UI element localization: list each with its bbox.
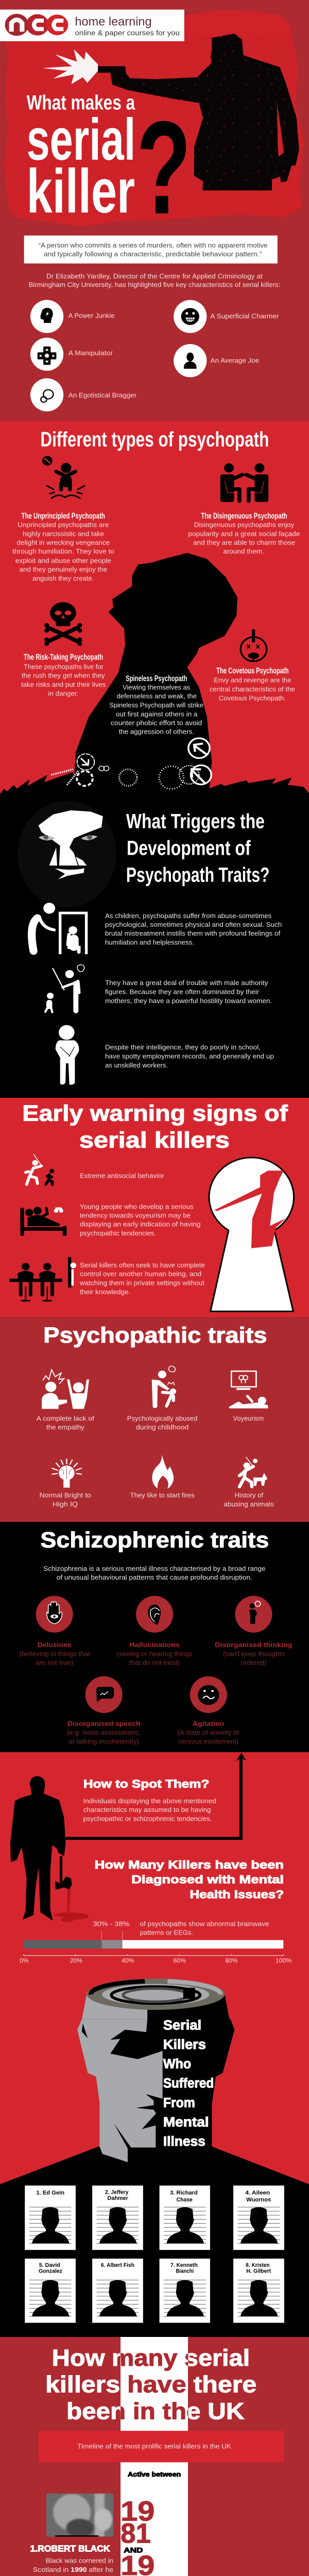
card: Ed Gein: 1. Ed Gein [36, 2190, 64, 2196]
trait: lack of empathy [37, 1370, 94, 1431]
sign: watching in private: control over another human being, and [80, 1270, 201, 1278]
heading [126, 809, 265, 859]
card: Kenneth Bianchi [160, 2259, 210, 2323]
heading: been in the UK [66, 2398, 244, 2425]
trait: lack of empathy: the empathy [46, 1423, 84, 1431]
attribution text: Dr Elizabeth Yardley, Director of the Centre for Applied Criminology at [46, 273, 263, 280]
chart: brainwave bar: of psychopaths show abnormal brainwave [140, 1920, 269, 1927]
characteristic: egotistical bragger [30, 378, 137, 412]
arrow [64, 1753, 246, 1838]
entry: Robert Black: Scotland in 1990 after he [33, 2566, 113, 2573]
card: David Gonzalez [25, 2259, 76, 2323]
trait: agitation [190, 1676, 227, 1727]
illustration: head silhouette [73, 553, 237, 796]
trait: disorganised thinking: Disorganised thinking [215, 1641, 292, 1649]
heading: Psychopathic traits [43, 1323, 267, 1348]
icon: dagger through face [241, 630, 267, 662]
trait: starts fires [130, 1454, 195, 1499]
trait: voyeurism [229, 1371, 268, 1422]
heading: Development of [127, 836, 251, 859]
text: how to spot them: How to Spot Them? [83, 1777, 209, 1790]
panel: hero [0, 0, 309, 421]
trait: psychologically abused: during childhood [136, 1423, 188, 1431]
text: authority [105, 979, 272, 1005]
characteristic: egotistical bragger: An Egotistical Bragger [68, 392, 137, 399]
card: David Gonzalez: 5. David [39, 2262, 60, 2268]
sign: watching in private: Serial killers often seek to have complete [80, 1261, 205, 1269]
sign: antisocial behaviour: Extreme antisocial behavior [80, 1172, 164, 1179]
intro text [43, 1565, 265, 1581]
entry: Robert Black: 1.ROBERT BLACK [30, 2544, 110, 2553]
text: authority: figures. Because they are often dominated by their [105, 988, 260, 995]
card: Aileen Wuornos [233, 2185, 284, 2250]
trait: disorganised thinking: ordered) [241, 1659, 266, 1666]
trait: abusing animals: History of [234, 1492, 263, 1499]
heading: serial killers who suffered: Mental [163, 2114, 209, 2129]
card: unprincipled psychopath: through humiliation. They love to [12, 548, 114, 555]
panel: schizophrenic traits [0, 1522, 309, 1752]
trait: high IQ: Normal Bright to [40, 1492, 91, 1499]
card: David Gonzalez: Gonzalez [39, 2268, 62, 2274]
trait: delusions: Delusions [38, 1641, 72, 1649]
chart: brainwave bar: 40% [122, 1957, 134, 1964]
icon: adult and child in doorway [32, 903, 87, 954]
card: spineless psychopath: out first against others in a [116, 710, 198, 718]
photo: Robert Black [46, 2494, 113, 2537]
quote box [24, 235, 278, 263]
heading: Schizophrenic traits [40, 1528, 269, 1552]
card: Richard Chase [160, 2185, 210, 2250]
text: agitation description [177, 1729, 239, 1745]
card: disingenuous psychopath: popularity and a great social façade [188, 530, 300, 537]
heading: Early warning signs of [22, 1100, 288, 1126]
card: disingenuous psychopath: and they are able to charm those [193, 539, 295, 546]
attribution text [28, 273, 281, 289]
card: Richard Chase: Chase [176, 2197, 193, 2203]
trait: hallucinations: Hallucinations [129, 1641, 180, 1649]
chart: brainwave bar [20, 1920, 291, 1964]
heading: serial killers who suffered: Serial [163, 2018, 201, 2032]
card: Albert Fish: 6. Albert Fish [101, 2262, 134, 2268]
text: how to spot them: Individuals displaying the above mentioned [83, 1797, 216, 1805]
trait: delusions: are not true) [36, 1659, 73, 1666]
trait: voyeurism: Voyeurism [233, 1415, 264, 1422]
title question mark: ? [136, 94, 191, 242]
trait: disorganised thinking: (can't keep thoughts [223, 1650, 285, 1657]
card: Jeffery Dahmer: Dahmer [108, 2195, 128, 2201]
characteristic: power junkie: A Power Junkie [68, 312, 115, 319]
title [27, 91, 135, 226]
sign: watching in private: their knowledge. [80, 1289, 130, 1296]
card: disingenuous psychopath: around them. [224, 548, 264, 555]
card: unprincipled psychopath [12, 512, 114, 582]
illustration: grass and scattered symbols [0, 738, 309, 796]
text: abuse: psychological, sometimes physical and often sexual. Such [105, 921, 282, 928]
trait: agitation: Agitation [193, 1720, 224, 1727]
card: risk-taking psychopath: These psychopaths live for [24, 663, 104, 670]
chart: brainwave bar: 30% - 38% [93, 1920, 129, 1927]
illustration: labyrinth head top [82, 1978, 230, 2020]
card: Kenneth Bianchi: 7. Kenneth [170, 2262, 198, 2268]
characteristic: superficial charmer [174, 300, 279, 333]
heading: How Many Killers have been [95, 1858, 284, 1871]
heading: killers have there [45, 2371, 256, 2398]
heading: What Triggers the [126, 809, 265, 833]
icon: standing figure [56, 1025, 79, 1084]
illustration: keyhole with knife [209, 1158, 294, 1311]
title: killer [27, 156, 135, 226]
heading: serial killers who suffered: Suffered [163, 2076, 214, 2091]
sign: voyeurism: displaying an early indication of having [80, 1221, 201, 1228]
characteristic: manipulator [30, 337, 113, 371]
label: active between: Active between [128, 2470, 181, 2478]
card: spineless psychopath: Viewing themselves as [123, 684, 190, 691]
characteristic: manipulator: A Manipulator [68, 349, 113, 357]
card: unprincipled psychopath: Unprincipled psychopaths are [18, 521, 109, 529]
years: 1981 and 1986: 81 [121, 2518, 151, 2549]
card: Aileen Wuornos: 4. Aileen [245, 2190, 270, 2196]
text: school [105, 1044, 274, 1069]
trait: delusions: (believing in things that [19, 1650, 90, 1657]
heading: serial killers who suffered [163, 2018, 214, 2149]
card: spineless psychopath: Spineless Psychopath will strike [109, 701, 203, 709]
characteristic: average joe [174, 344, 259, 377]
illustration: split-face head and shoulders [0, 2019, 309, 2337]
sign: voyeurism [20, 1203, 201, 1237]
text: agitation description: (A state of anxiety or [177, 1729, 239, 1736]
panel: psychopath types [0, 421, 309, 796]
trait: disorganised speech [67, 1676, 140, 1727]
years: 1981 and 1986 [121, 2496, 154, 2576]
years: 1981 and 1986: 19 [121, 2496, 154, 2527]
heading: serial killers [79, 1127, 230, 1153]
card: Richard Chase: 3. Richard [170, 2190, 198, 2196]
trait: disorganised speech: Disorganised speech [67, 1720, 140, 1727]
card: Kristen H. Gilbert: H. Gilbert [246, 2268, 271, 2274]
years: 1981 and 1986: AND [124, 2547, 143, 2554]
entry: Robert Black: Black was cornered in [46, 2557, 113, 2565]
heading [45, 2345, 256, 2425]
text: how to spot them: characteristics may assumed to be having [83, 1806, 211, 1814]
heading [22, 1100, 288, 1153]
card: unprincipled psychopath: delight in wrecking vengeance [17, 539, 110, 546]
illustration: gunman silhouette [98, 33, 299, 191]
trait: delusions [19, 1596, 90, 1666]
banner [39, 2431, 284, 2462]
text: school: Despite their intelligence, they do poorly in school, [105, 1044, 261, 1051]
trait: lack of empathy: A complete lack of [37, 1415, 94, 1422]
heading: Health Issues? [190, 1888, 284, 1901]
characteristic: superficial charmer: A Superficial Charmer [210, 313, 279, 320]
text: school: have spotty employment records, and generally end up [105, 1053, 274, 1060]
panel: UK serial killers timeline [0, 2337, 309, 2576]
card: spineless psychopath: counter phobic effort to avoid [111, 719, 202, 726]
characteristic: average joe: An Average Joe [211, 357, 259, 364]
quote box: and typically following a characteristic, predictable behaviour pattern.” [44, 250, 262, 258]
chart: brainwave bar: 80% [225, 1957, 237, 1964]
card: Ed Gein [25, 2185, 76, 2250]
card: Kristen H. Gilbert: 8. Kristen [246, 2262, 270, 2268]
text: authority: They have a great deal of trouble with male authority [105, 979, 268, 987]
card: unprincipled psychopath: exploit and abuse other people [15, 557, 111, 564]
sign: voyeurism: psychopathic tendencies. [80, 1229, 156, 1237]
sign: watching in private [9, 1257, 205, 1301]
title: What makes a [27, 91, 135, 114]
trait: starts fires: They like to start fires [130, 1492, 195, 1499]
card: covetous psychopath: central characteristics of the [210, 685, 295, 693]
card: unprincipled psychopath: and they genuinely enjoy the [19, 566, 107, 573]
attribution text: Birmingham City University, has highlighted five key characteristics of serial killers: [28, 281, 281, 289]
card: risk-taking psychopath: take risks and put their lives [21, 681, 106, 688]
text: agitation description: nervous excitement) [178, 1738, 238, 1745]
card: risk-taking psychopath [21, 653, 106, 697]
trait: high IQ [40, 1459, 91, 1508]
trait: psychologically abused [127, 1366, 197, 1431]
heading: serial killers who suffered: Illness [163, 2134, 205, 2149]
trait: abusing animals [224, 1457, 274, 1508]
trait: hallucinations: that do not exist) [129, 1659, 180, 1666]
heading: serial killers who suffered: Killers [163, 2037, 206, 2052]
entry: Robert Black [27, 2544, 113, 2576]
card: unprincipled psychopath: highly narcissistic and take [23, 530, 104, 537]
card: risk-taking psychopath: the rush they get when they [22, 672, 105, 680]
trait: abusing animals: abusing animals [224, 1500, 274, 1508]
card: Albert Fish [92, 2259, 143, 2323]
card: disingenuous psychopath: Disingenuous psychopaths enjoy [194, 521, 294, 529]
logo box: home learning [75, 15, 152, 28]
text: abuse: As children, psychopaths suffer from abuse-sometimes [105, 912, 271, 920]
chart: brainwave bar: 0% [20, 1957, 28, 1964]
chart: brainwave bar: patterns or EEGs. [140, 1929, 193, 1937]
chart: brainwave bar: 100% [276, 1957, 291, 1964]
sign: watching in private: watching them in private settings without [79, 1279, 204, 1286]
chart: brainwave bar: 60% [174, 1957, 186, 1964]
card: spineless psychopath: defenseless and weak, the [117, 692, 197, 700]
heading: How many serial [52, 2345, 250, 2371]
logo box: online & paper courses for you [75, 29, 180, 37]
icon: skull and crossbones [44, 602, 82, 646]
card: unprincipled psychopath: anguish they create. [32, 575, 94, 582]
text: how to spot them: psychopathic or schizophrenic tendencies. [83, 1815, 212, 1822]
icon: muzzle flash [42, 49, 98, 84]
card: covetous psychopath: Covetous Psychopath. [219, 694, 286, 702]
card: spineless psychopath: the aggression of others. [119, 728, 194, 736]
sign: voyeurism: Young people who develop a serious [80, 1203, 194, 1210]
trait: psychologically abused: Psychologically abused [127, 1415, 197, 1422]
banner: Timeline of the most prolific serial killers in the UK [77, 2443, 231, 2450]
text: disorganised speech description: (e.g. loose associations, [67, 1729, 140, 1736]
face chin [55, 868, 84, 879]
icon: two seated figures [220, 463, 268, 502]
text: school: as unskilled workers. [105, 1061, 168, 1069]
card: unprincipled psychopath: The Unprincipled Psychopath [21, 512, 105, 520]
text: abuse [105, 912, 282, 946]
panel: early warning signs [0, 1098, 309, 1317]
card: disingenuous psychopath [188, 512, 300, 555]
logo box [0, 10, 184, 41]
intro text: Schizophrenia is a serious mental illness characterised by a broad range [43, 1565, 265, 1572]
text: authority: mothers, they have a powerful hostility toward women. [105, 997, 272, 1005]
card: Jeffery Dahmer: 2. Jeffery [105, 2190, 129, 2195]
card: spineless psychopath: Spineless Psychopath [126, 674, 187, 683]
text: how to spot them [83, 1777, 216, 1822]
trait: hallucinations: (seeing or hearing things [117, 1650, 193, 1657]
heading: serial killers who suffered: Who [163, 2056, 191, 2071]
card: covetous psychopath: Envy and revenge are the [214, 676, 291, 684]
title: serial [27, 107, 135, 173]
card: spineless psychopath [109, 674, 203, 736]
illustration: menacing face [18, 801, 116, 907]
trait: disorganised thinking [215, 1596, 292, 1666]
card: covetous psychopath [210, 666, 295, 702]
heading: serial killers who suffered: From [163, 2095, 195, 2110]
card: Kenneth Bianchi: Bianchi [176, 2268, 194, 2274]
panel: psychopathic traits [0, 1317, 309, 1522]
illustration: man with axe [10, 1776, 89, 1922]
intro text: of unusual behavioural patterns that cause profound disruption. [57, 1573, 252, 1581]
card: Aileen Wuornos: Wuornos [246, 2197, 271, 2203]
text: abuse: brutal mistreatment instills them with profound feelings of [105, 929, 280, 937]
trait: high IQ: High IQ [53, 1500, 78, 1508]
text: abuse: humiliation and helplessness. [105, 939, 194, 946]
trait: hallucinations [117, 1596, 193, 1666]
text: disorganised speech description [67, 1729, 140, 1745]
card: Jeffery Dahmer [92, 2185, 143, 2250]
heading: Diagnosed with Mental [131, 1873, 284, 1886]
quote box: “A person who commits a series of murders, often with no apparent motive [39, 242, 268, 249]
icon: figure with stick and child [45, 964, 84, 1012]
card: risk-taking psychopath: The Risk-Taking Psychopath [24, 653, 103, 662]
background: distressed red panel [4, 10, 303, 226]
characteristic: power junkie [30, 300, 115, 333]
sign: voyeurism: tendency towards voyeurism may be [80, 1212, 191, 1219]
sign: antisocial behaviour [26, 1154, 164, 1184]
text: disorganised speech description: or talking incoherently) [68, 1738, 139, 1745]
card: Kristen H. Gilbert [233, 2259, 284, 2323]
panel: triggers [0, 794, 309, 1098]
panel: how to spot and statistics [0, 1752, 309, 2337]
icon: tantrum child [42, 456, 84, 498]
heading [95, 1858, 284, 1901]
chart: brainwave bar: 20% [70, 1957, 82, 1964]
card: risk-taking psychopath: in danger. [48, 690, 78, 697]
